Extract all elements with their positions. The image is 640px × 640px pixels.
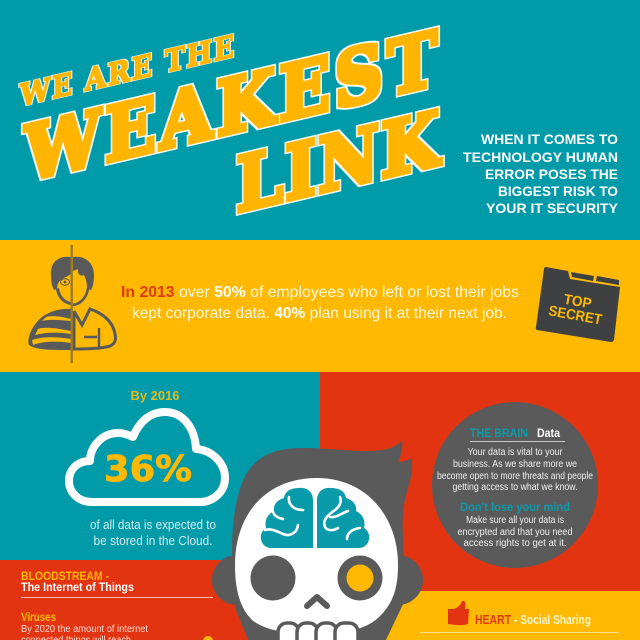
panel: the brain: THE BRAIN — [470, 428, 528, 440]
cloud statistic: By 2016 — [130, 389, 180, 403]
teeth — [278, 623, 358, 640]
subtitle text block: ERROR POSES THE — [485, 166, 618, 182]
skull illustration — [212, 440, 423, 640]
title: WEAKEST — [24, 15, 437, 200]
title: LINK — [236, 94, 441, 231]
title: WE ARE THE — [19, 28, 234, 113]
panel: bloodstream: Viruses — [21, 612, 56, 624]
face — [235, 478, 398, 634]
statistic text: In 2013 over 50% of employees who left or lost their jobs — [121, 284, 519, 301]
cloud statistic: 36% — [104, 449, 192, 490]
panel: the brain: Data — [537, 428, 561, 440]
panel: bloodstream — [21, 569, 213, 640]
subtitle text block: YOUR IT SECURITY — [486, 200, 619, 216]
cloud statistic: be stored in the Cloud. — [94, 534, 212, 548]
panel: the brain — [432, 402, 598, 568]
icon: thumbs up — [448, 601, 469, 625]
icon: top secret folder: TOP — [562, 292, 593, 313]
subtitle text block: TECHNOLOGY HUMAN — [463, 149, 618, 165]
nose — [307, 597, 327, 606]
subtitle text block: WHEN IT COMES TO — [481, 131, 618, 147]
icon: brain — [261, 488, 369, 548]
panel: heart: HEART — [475, 613, 511, 627]
panel: the brain: Your data is vital to your — [468, 447, 563, 458]
panel: the brain: become open to more threats and people — [437, 471, 593, 482]
panel: the brain: encrypted and that you need — [458, 527, 572, 538]
subtitle text block — [463, 131, 619, 216]
icon: top secret folder: SECRET — [547, 303, 603, 329]
panel: the brain: getting access to what we know. — [452, 482, 578, 493]
panel: heart: - Social Sharing — [514, 613, 591, 627]
icon: top secret folder — [536, 267, 620, 342]
cloud statistic — [69, 389, 225, 548]
statistic text: kept corporate data. 40% plan using it at their next job. — [132, 305, 507, 322]
ears — [212, 555, 262, 605]
cloud statistic: of all data is expected to — [90, 518, 216, 532]
icon: split employee — [28, 245, 116, 363]
icon: cloud — [69, 412, 225, 502]
hair and skull outline — [232, 440, 412, 640]
panel: bloodstream: The Internet of Things — [21, 580, 134, 594]
panel: the brain: Don't lose your mind — [460, 502, 570, 514]
panel: the brain: business. As we share more we — [453, 459, 577, 470]
panel: the brain: access rights to get at it. — [464, 538, 566, 549]
panel: bloodstream: BLOODSTREAM - — [21, 569, 109, 583]
panel: bloodstream: By 2020 the amount of internet — [21, 623, 148, 635]
eyes — [250, 556, 296, 600]
panel: heart — [420, 601, 619, 633]
statistic text — [121, 284, 519, 322]
subtitle text block: BIGGEST RISK TO — [498, 183, 618, 199]
panel: the brain: Make sure all your data is — [466, 515, 564, 526]
